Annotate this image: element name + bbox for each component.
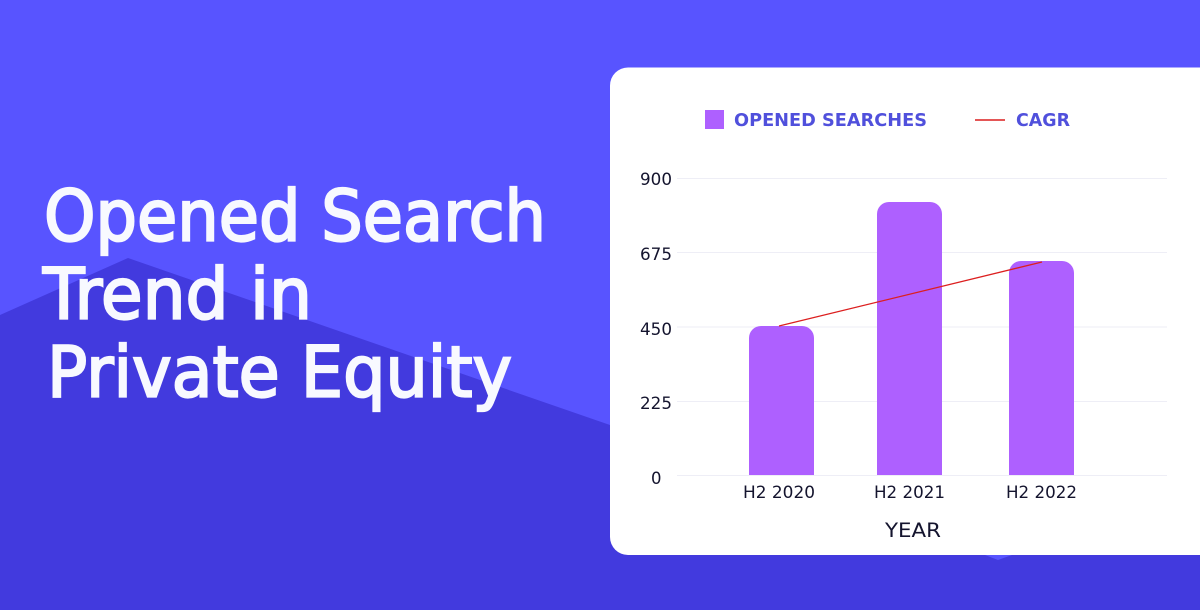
legend label: opened searches: OPENED SEARCHES [734,110,927,131]
panel: chart card [610,68,1200,555]
x axis title: YEAR [884,519,941,542]
background mountain shape [0,258,1200,610]
legend label: CAGR: CAGR [1016,110,1070,131]
bar: H2 2022 [1009,261,1074,475]
bar chart [640,170,1167,542]
y axis labels: 225 [640,394,672,414]
x axis labels: H2 2020 [743,483,815,503]
bar: H2 2020 [749,326,814,475]
title: Trend in [42,254,312,336]
x axis labels [743,483,1077,503]
y axis labels: 900 [640,170,672,190]
y axis labels: 675 [640,245,672,265]
y axis labels: 450 [640,320,672,340]
legend line: CAGR [975,119,1005,121]
x axis labels: H2 2021 [874,483,945,503]
title [42,176,546,414]
legend [705,110,1070,131]
title: Opened Search [44,176,546,258]
y axis labels [640,170,672,489]
x axis labels: H2 2022 [1006,483,1077,503]
card background [610,68,1200,555]
title: Private Equity [47,332,512,414]
bar: H2 2021 [877,202,942,475]
CAGR trend line [779,262,1042,326]
legend swatch: opened searches [705,110,724,129]
y axis labels: 0 [651,469,662,489]
